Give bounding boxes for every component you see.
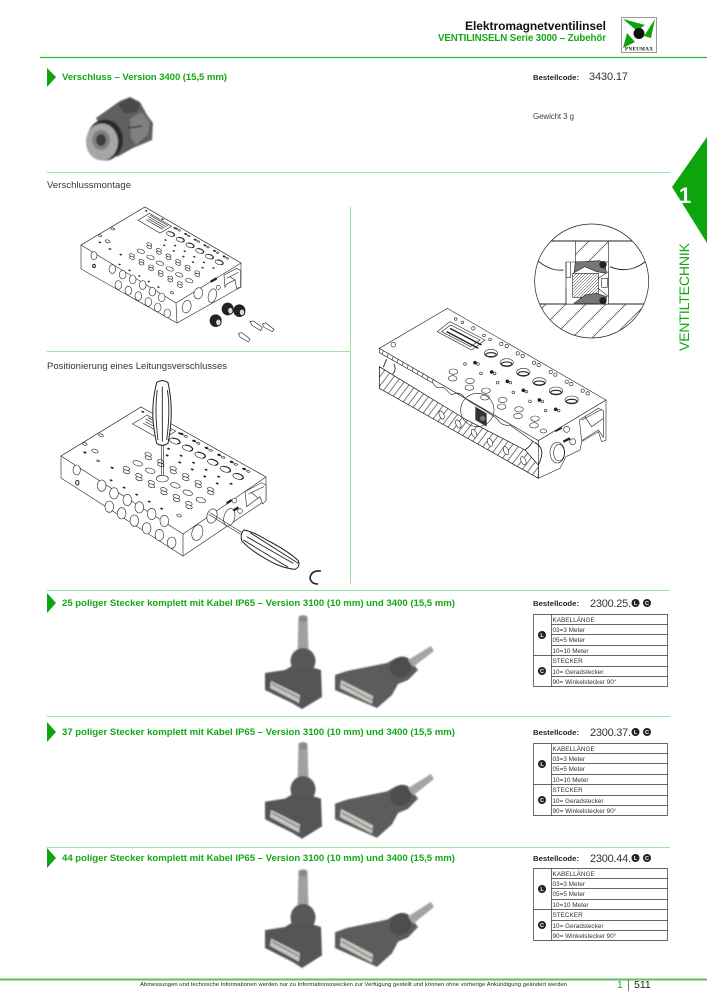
order code: 2300.25: 2300.25. — [590, 598, 631, 610]
photo: connectors 25 poles — [265, 615, 434, 709]
chapter tab: 1 — [679, 183, 691, 208]
caption: Verschlussmontage: Verschlussmontage — [47, 180, 131, 191]
page number: 1 — [617, 979, 623, 991]
top plate — [379, 308, 606, 441]
order code: 2300.37: L — [634, 730, 638, 736]
photo: connectors 44 poles — [265, 869, 434, 968]
order code: 3430.17 — [533, 71, 628, 83]
table: options 44 poles — [534, 868, 668, 940]
table: options 44 poles: L — [540, 887, 544, 893]
section heading: 44 poliger — [47, 848, 455, 868]
table: options 25 poles — [534, 614, 668, 686]
divider horizontal — [47, 350, 350, 352]
detail circle marker with dark closure — [461, 393, 494, 427]
photo: connectors 37 poles — [265, 742, 434, 839]
table: options 44 poles: 10= Geradstecker — [552, 923, 604, 930]
section heading: Verschluss — [47, 68, 227, 87]
order code: 2300.44: 2300.44. — [590, 853, 631, 865]
icon: angled screwdriver — [209, 513, 299, 569]
section T-cuts — [438, 410, 527, 466]
order code: 2300.44: C — [645, 856, 649, 862]
order code: 3430.17: 3430.17 — [589, 71, 628, 83]
order code: 2300.37: C — [645, 730, 649, 736]
diagram: sectioned valve block — [379, 224, 650, 478]
header subtitle: VENTILINSELN Serie 3000 – Zubehör — [438, 33, 606, 44]
section heading: 25 poliger: 25 poliger Stecker komplett mit Kabel IP65 – Version 3100 (10 mm) und 3400 (15,5 mm) — [62, 598, 455, 609]
page number — [617, 979, 651, 991]
header title — [438, 19, 606, 44]
table: options 37 poles: C — [540, 798, 544, 804]
diagram: valve block with screwdrivers — [61, 381, 321, 584]
table: options 37 poles: 10= Geradstecker — [552, 798, 604, 805]
order code: 2300.44: L — [634, 856, 638, 862]
table: options 37 poles: L — [540, 762, 544, 768]
order code: 2300.37 — [533, 727, 651, 739]
section heading: 44 poliger: 44 poliger Stecker komplett mit Kabel IP65 – Version 3100 (10 mm) und 3400 (15,5 mm) — [62, 853, 455, 864]
chapter tab — [672, 137, 707, 243]
icon: vertical screwdriver — [153, 381, 171, 482]
slot — [437, 322, 485, 350]
table: options 44 poles: C — [540, 923, 544, 929]
order code: 2300.37: 2300.37. — [590, 727, 631, 739]
footer note: Abmessungen und technische Informationen werden nur zu Informationszwecken zur Verfügung gestellt und können ohne vorherige Ankündigung geändert werden — [140, 982, 567, 988]
end face — [538, 400, 606, 478]
order code: 2300.37: Bestellcode: — [533, 728, 579, 737]
plate edge ticks — [382, 351, 433, 383]
end face ports and connector — [190, 483, 266, 542]
table: options 44 poles: 05=5 Meter — [552, 891, 586, 898]
table: options 25 poles: 03=3 Meter — [552, 627, 586, 634]
table: options 25 poles: STECKER — [552, 658, 583, 665]
ports — [391, 318, 589, 433]
divider — [47, 590, 670, 592]
hatched section — [379, 367, 538, 478]
table: options 25 poles: 90= Winkelstecker 90° — [552, 678, 617, 686]
icon: threaded plugs — [210, 303, 274, 342]
table: options 37 poles: KABELLÄNGE — [552, 745, 595, 753]
table: options 44 poles: KABELLÄNGE — [552, 870, 595, 878]
table: options 37 poles: 03=3 Meter — [552, 756, 586, 763]
table: options 44 poles: 90= Winkelstecker 90° — [552, 932, 617, 940]
footer rule — [0, 978, 707, 980]
divider vertical — [350, 207, 352, 584]
divider — [47, 846, 670, 848]
table: options 25 poles: 10= Geradstecker — [552, 669, 604, 676]
section heading: 25 poliger — [47, 593, 455, 613]
logo: Pneumax — [622, 18, 656, 52]
long side ports — [73, 465, 176, 548]
order code: 3430.17: Bestellcode: — [533, 73, 579, 82]
table: options 37 poles: 90= Winkelstecker 90° — [552, 807, 617, 815]
table: options 37 poles: 10=10 Meter — [552, 777, 589, 784]
icon: retaining ring — [310, 571, 321, 584]
end face ports and connector — [181, 268, 241, 314]
order code: 2300.44 — [533, 853, 651, 865]
page number: 511 — [634, 979, 651, 991]
table: options 37 poles — [534, 744, 668, 816]
order code: 2300.25 — [533, 598, 651, 610]
section heading: Verschluss: Verschluss – Version 3400 (15,5 mm) — [62, 72, 227, 83]
table: options 25 poles: C — [540, 669, 544, 675]
table: options 25 poles: KABELLÄNGE — [552, 616, 595, 624]
chapter label: VENTILTECHNIK — [676, 242, 692, 351]
divider — [47, 716, 670, 718]
table: options 44 poles: 03=3 Meter — [552, 881, 586, 888]
table: options 37 poles: STECKER — [552, 787, 583, 794]
header title: Elektromagnetventilinsel — [465, 19, 606, 33]
order code: 2300.25: L — [634, 601, 638, 607]
logo: Pneumax: PNEUMAX — [625, 48, 653, 52]
section heading: 37 poliger: 37 poliger Stecker komplett mit Kabel IP65 – Version 3100 (10 mm) und 3400 (15,5 mm) — [62, 727, 455, 738]
photo: closure plug — [86, 97, 153, 160]
weight: Gewicht 3 g — [533, 112, 574, 121]
table: options 44 poles: 10=10 Meter — [552, 902, 589, 909]
table: options 25 poles: 05=5 Meter — [552, 637, 586, 644]
inset: section detail — [533, 224, 650, 341]
section heading: 37 poliger — [47, 722, 455, 742]
table: options 44 poles: STECKER — [552, 912, 583, 919]
table: options 25 poles: L — [540, 633, 544, 639]
order code: 2300.25: Bestellcode: — [533, 599, 579, 608]
order code: 2300.44: Bestellcode: — [533, 854, 579, 863]
diagram: valve block with plugs — [81, 207, 274, 342]
order code: 2300.25: C — [645, 601, 649, 607]
caption: Positionierung: Positionierung eines Leitungsverschlusses — [47, 361, 227, 372]
long side ports — [91, 252, 171, 318]
header rule — [40, 56, 707, 58]
table: options 37 poles: 05=5 Meter — [552, 766, 586, 773]
divider — [47, 172, 670, 174]
table: options 25 poles: 10=10 Meter — [552, 648, 589, 655]
